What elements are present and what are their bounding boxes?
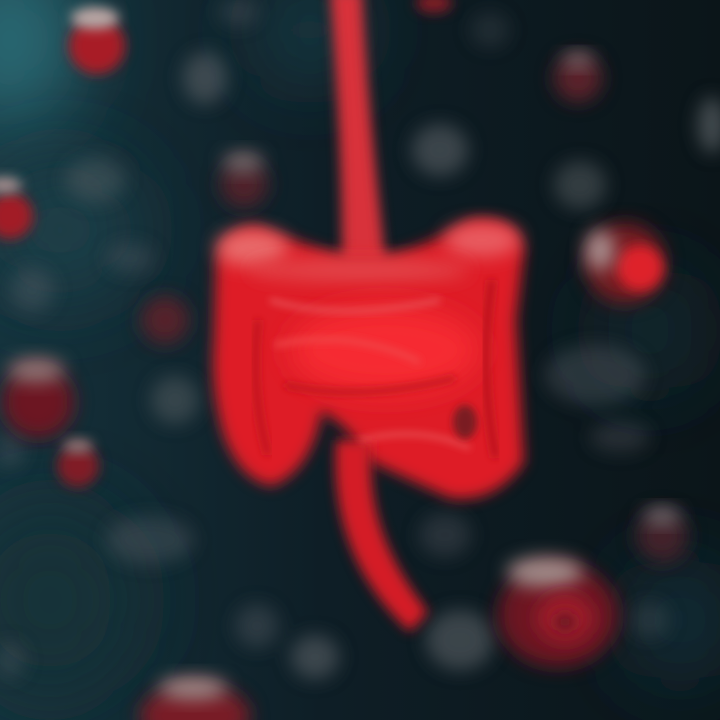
cell: top center sliver: [416, 0, 452, 13]
cell: right bright: [585, 223, 665, 303]
cell: upper center dim: [220, 152, 268, 208]
large intestine body: [213, 219, 524, 499]
cell: bottom center: [140, 677, 250, 720]
dark spot on colon: [453, 405, 477, 439]
top lobe highlights: [216, 230, 288, 266]
cell: left edge: [0, 177, 33, 239]
cell: lower right dim: [636, 508, 688, 562]
cell: lower left small: [57, 439, 99, 487]
cell: top left: [69, 7, 125, 74]
stem: [330, 0, 386, 265]
central bright folds: [256, 280, 496, 458]
cell: lower right large: [498, 557, 618, 667]
cell: left dim: [141, 296, 189, 344]
intestine: [213, 0, 524, 632]
tail: [335, 440, 428, 632]
cell: left middle: [2, 358, 74, 438]
cell: top right dim: [554, 53, 602, 102]
